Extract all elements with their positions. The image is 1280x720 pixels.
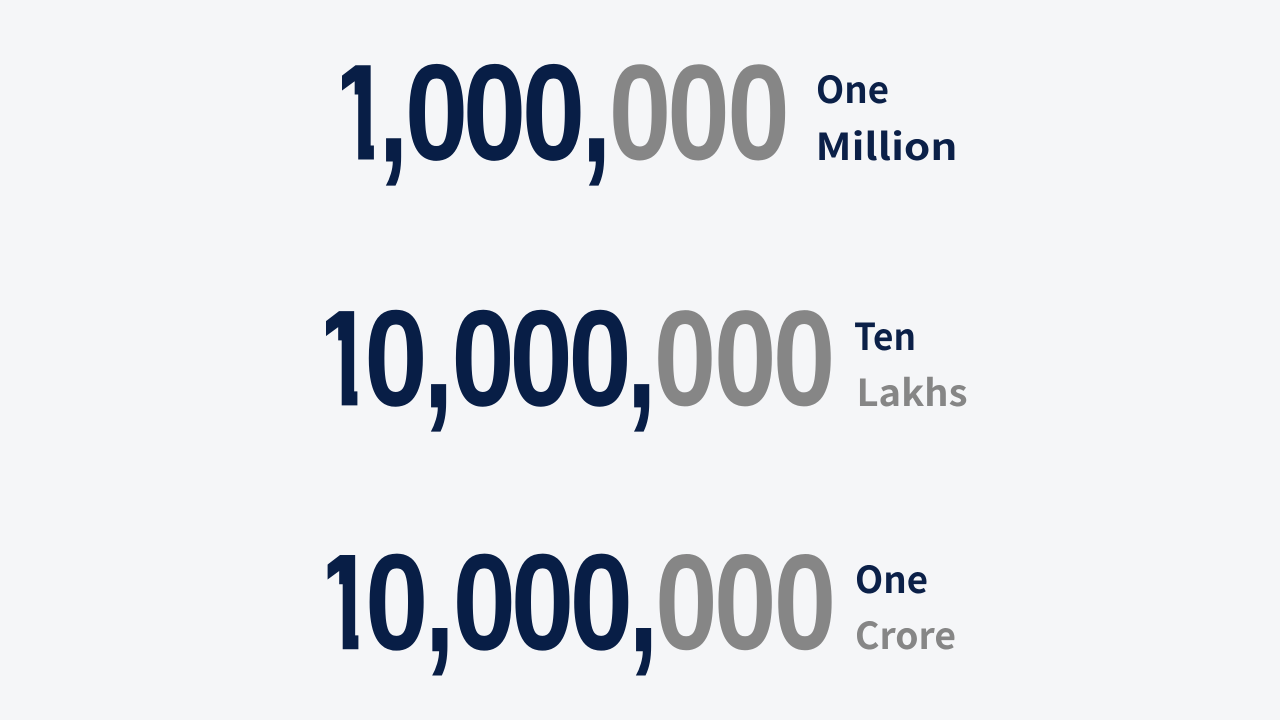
number: 10,000,000 ten lakhs: 0 (568, 281, 632, 435)
label: One Crore: Crore (855, 606, 956, 660)
number: 1,000,000: 0 (608, 35, 672, 189)
number: 10,000,000 one crore: 0 (365, 525, 428, 679)
number: 10,000,000 ten lakhs: 0 (364, 281, 428, 435)
number: 1,000,000: , (379, 21, 408, 195)
label: Ten Lakhs: Ten (854, 307, 916, 361)
label: Ten Lakhs: Lakhs (856, 363, 968, 417)
number: 1,000,000: , (582, 21, 611, 195)
number: 10,000,000 one crore (312, 511, 837, 685)
number: 1,000,000: 1 (328, 36, 392, 189)
label: One Million (816, 60, 958, 171)
row: ten lakhs (311, 267, 968, 441)
number: 10,000,000 one crore: , (425, 511, 455, 685)
number: 10,000,000 ten lakhs: 0 (510, 281, 573, 435)
label: One Million: Million (816, 117, 958, 171)
label: One Crore (855, 550, 956, 660)
number: 10,000,000 ten lakhs: , (424, 267, 453, 441)
number: 10,000,000 one crore: 0 (570, 525, 633, 679)
number: 1,000,000: 0 (463, 35, 526, 189)
label: One Million: One (816, 60, 889, 114)
label: One Crore: One (855, 550, 928, 604)
label: Ten Lakhs (854, 307, 968, 417)
number: 10,000,000 ten lakhs: 0 (653, 281, 717, 435)
number: 1,000,000: 0 (405, 35, 468, 189)
number: 1,000,000: 0 (727, 35, 790, 189)
row: one million (328, 21, 958, 195)
number: 10,000,000 ten lakhs (311, 267, 836, 441)
number: 10,000,000 one crore: 0 (773, 525, 837, 679)
number: 10,000,000 one crore: 0 (714, 525, 777, 679)
number: 10,000,000 ten lakhs: , (627, 267, 656, 441)
number: 1,000,000: 0 (667, 35, 730, 189)
number: 10,000,000 ten lakhs: 1 (311, 281, 376, 434)
number: 10,000,000 ten lakhs: 0 (714, 281, 777, 435)
number: 10,000,000 one crore: , (629, 511, 658, 685)
number: 10,000,000 one crore: 1 (312, 525, 377, 678)
number: 10,000,000 one crore: 0 (453, 525, 516, 679)
number: 1,000,000 (328, 21, 790, 195)
number: 10,000,000 one crore: 0 (655, 525, 718, 679)
number: 10,000,000 ten lakhs: 0 (772, 281, 836, 435)
number: 1,000,000: 0 (522, 35, 585, 189)
number: 10,000,000 one crore: 0 (511, 525, 574, 679)
number: 10,000,000 ten lakhs: 0 (451, 281, 515, 435)
row: one crore (312, 511, 956, 685)
